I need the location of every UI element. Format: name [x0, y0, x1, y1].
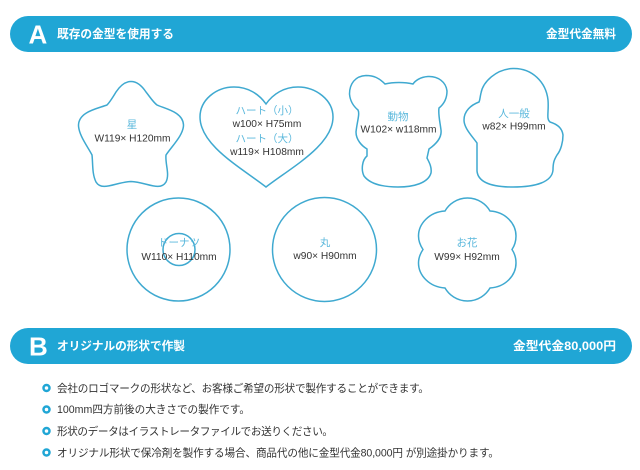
bullet 2: 100mm四方前後の大きさでの製作です。: [57, 403, 250, 416]
shape: animal: 動物: [388, 110, 408, 123]
heading: use existing mold: 既存の金型を使用する: [57, 27, 174, 41]
header bar A: [10, 16, 632, 52]
bullet 4: オリジナル形状で保冷剤を製作する場合、商品代の他に金型代金80,000円 が別途掛かります。: [57, 446, 499, 460]
bullet list: [44, 382, 499, 460]
shape: person: [464, 68, 563, 187]
shape: donut: W110× H110mm: [141, 252, 217, 263]
shape: flower: [418, 198, 516, 301]
shape: star: [78, 82, 184, 186]
header bar B: [10, 328, 632, 364]
shape: animal: [350, 76, 447, 187]
shape: flower: W99× H92mm: [434, 252, 500, 263]
shape: person: 人一般: [498, 107, 530, 120]
shape: heart: ハート（小）: [236, 105, 298, 117]
mold fee 80,000 yen: 金型代金80,000円: [513, 339, 616, 353]
bullet 1: 会社のロゴマークの形状など、お客様ご希望の形状で製作することができます。: [57, 382, 429, 395]
shape: animal: W102× w118mm: [361, 124, 436, 136]
bullet 3: 形状のデータはイラストレータファイルでお送りください。: [57, 425, 333, 438]
shape: round: [272, 198, 376, 302]
shape: heart: [200, 87, 333, 187]
shape: star: W119× H120mm: [95, 134, 170, 144]
shape: star: 星: [127, 119, 137, 131]
heading: original shape: オリジナルの形状で作製: [57, 339, 185, 353]
shape: heart: w100× H75mm: [232, 119, 301, 130]
shape: donut: [127, 198, 230, 301]
shape: round: 丸: [320, 236, 331, 249]
section letter A: A: [28, 20, 48, 50]
section letter B: B: [29, 332, 48, 362]
shape: donut: ドーナツ: [158, 237, 200, 249]
mold fee free: 金型代金無料: [546, 27, 616, 41]
shape: round: w90× H90mm: [292, 251, 357, 262]
shape: flower: お花: [456, 236, 478, 249]
shape: person: w82× H99mm: [481, 122, 546, 132]
shape: heart: w119× H108mm: [229, 147, 304, 158]
shape: heart: ハート（大）: [236, 132, 298, 145]
